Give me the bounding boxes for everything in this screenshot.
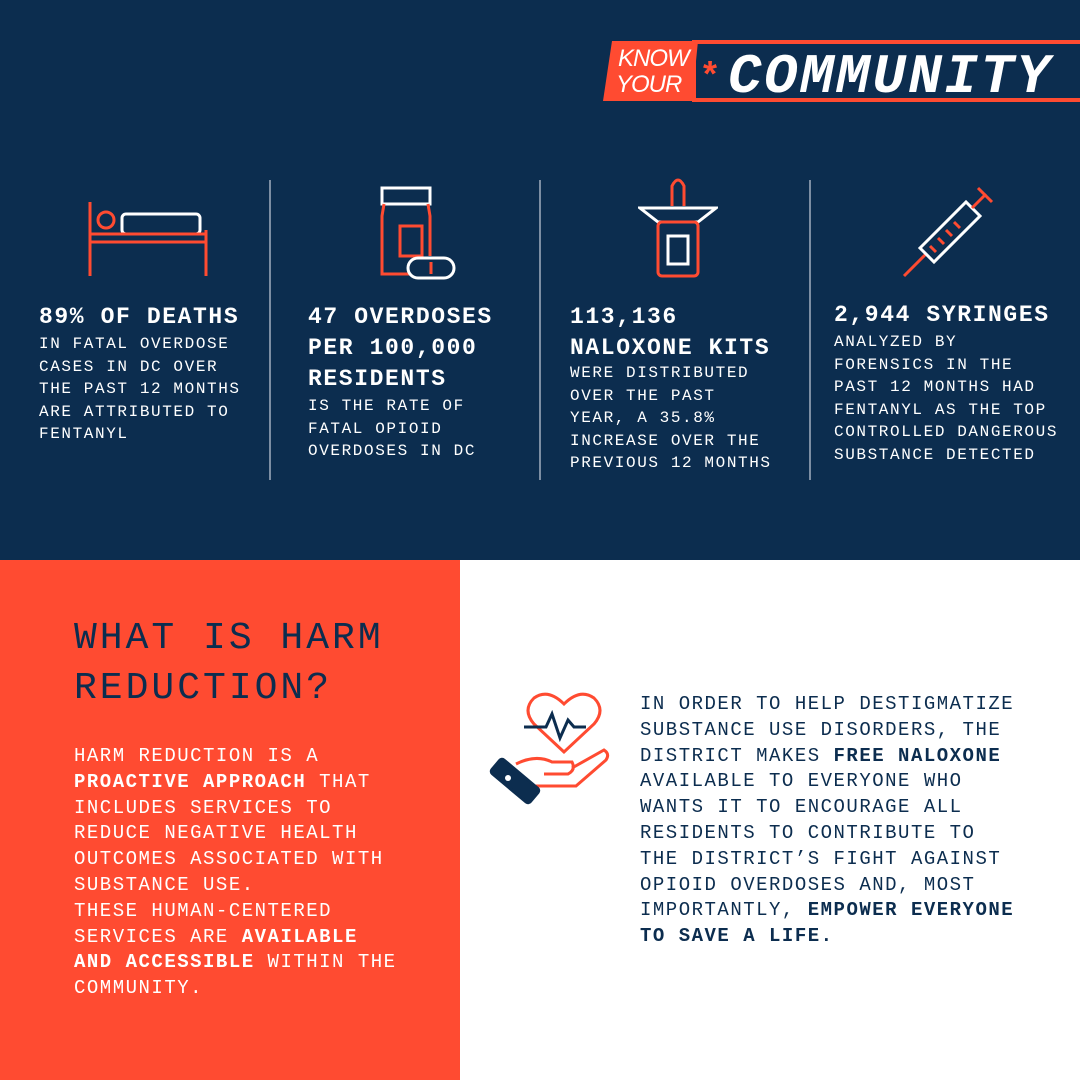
text block: naloxone (640, 693, 1014, 947)
stat 1: CASES IN DC OVER (39, 358, 218, 376)
stat 3: OVER THE PAST (570, 386, 716, 404)
stat 1: IN FATAL OVERDOSE (39, 335, 229, 353)
stat 1: FENTANYL (39, 425, 129, 443)
stat 4: SUBSTANCE DETECTED (834, 446, 1036, 464)
stat 4: FORENSICS IN THE (834, 356, 1013, 374)
stat 2: 47 OVERDOSES (308, 304, 493, 330)
stat 1 (39, 304, 241, 443)
text block: OUTCOMES ASSOCIATED WITH (74, 848, 384, 870)
text block: naloxone: OPIOID OVERDOSES AND, MOST (640, 874, 975, 896)
stat 1: ARE ATTRIBUTED TO (39, 402, 229, 420)
logo (603, 40, 1080, 102)
top panel: stats (0, 0, 1080, 560)
stat 4: CONTROLLED DANGEROUS (834, 423, 1058, 441)
stat 3: NALOXONE KITS (570, 335, 770, 361)
text block: naloxone: WANTS IT TO ENCOURAGE ALL (640, 796, 963, 818)
text block: AND ACCESSIBLE WITHIN THE (74, 951, 397, 973)
stat 3: YEAR, A 35.8% (570, 409, 716, 427)
stat 2: FATAL OPIOID (308, 420, 442, 438)
logo: * (703, 53, 717, 94)
heading (74, 617, 384, 710)
text block (74, 745, 397, 999)
stat 4: PAST 12 MONTHS HAD (834, 378, 1036, 396)
stat 1: 89% OF DEATHS (39, 304, 239, 330)
text block: SUBSTANCE USE. (74, 874, 255, 896)
logo: KNOW (618, 45, 692, 72)
stat 3: 113,136 (570, 304, 678, 330)
stat 3: WERE DISTRIBUTED (570, 364, 749, 382)
heading: REDUCTION? (74, 667, 332, 710)
stat 4 (834, 302, 1058, 464)
text block: naloxone: THE DISTRICT’S FIGHT AGAINST (640, 848, 1001, 870)
panel: what is harm reduction (0, 560, 460, 1080)
heading: WHAT IS HARM (74, 617, 384, 660)
stat 2: PER 100,000 (308, 335, 477, 361)
text block: naloxone: SUBSTANCE USE DISORDERS, THE (640, 719, 1001, 741)
text block: naloxone: DISTRICT MAKES FREE NALOXONE (640, 745, 1001, 767)
icon: pill bottle (380, 186, 456, 280)
text block: SERVICES ARE AVAILABLE (74, 926, 358, 948)
stat 4: FENTANYL AS THE TOP (834, 400, 1047, 418)
text block: INCLUDES SERVICES TO (74, 797, 332, 819)
icon: nasal spray (638, 178, 718, 278)
text block: naloxone: TO SAVE A LIFE. (640, 925, 834, 947)
text block: naloxone: IMPORTANTLY, EMPOWER EVERYONE (640, 899, 1014, 921)
stat 2: RESIDENTS (308, 366, 447, 392)
text block: PROACTIVE APPROACH THAT (74, 771, 371, 793)
stat 2: OVERDOSES IN DC (308, 442, 476, 460)
text block: naloxone: AVAILABLE TO EVERYONE WHO (640, 770, 963, 792)
icon: syringe (903, 187, 993, 277)
text block: COMMUNITY. (74, 977, 203, 999)
icon: hospital bed (88, 202, 208, 276)
stat 2: IS THE RATE OF (308, 397, 465, 415)
stat 3: PREVIOUS 12 MONTHS (570, 454, 772, 472)
stat 3: INCREASE OVER THE (570, 432, 760, 450)
logo: YOUR (616, 71, 682, 98)
text block: naloxone: RESIDENTS TO CONTRIBUTE TO (640, 822, 975, 844)
stat 4: ANALYZED BY (834, 333, 957, 351)
text block: REDUCE NEGATIVE HEALTH (74, 822, 358, 844)
text block: naloxone: IN ORDER TO HELP DESTIGMATIZE (640, 693, 1014, 715)
text block: THESE HUMAN-CENTERED (74, 900, 332, 922)
stat 2 (308, 304, 493, 460)
icon: heart in hand (490, 692, 610, 804)
stat 3 (570, 304, 772, 472)
text block: HARM REDUCTION IS A (74, 745, 319, 767)
stat 4: 2,944 SYRINGES (834, 302, 1050, 328)
stat 1: THE PAST 12 MONTHS (39, 380, 241, 398)
